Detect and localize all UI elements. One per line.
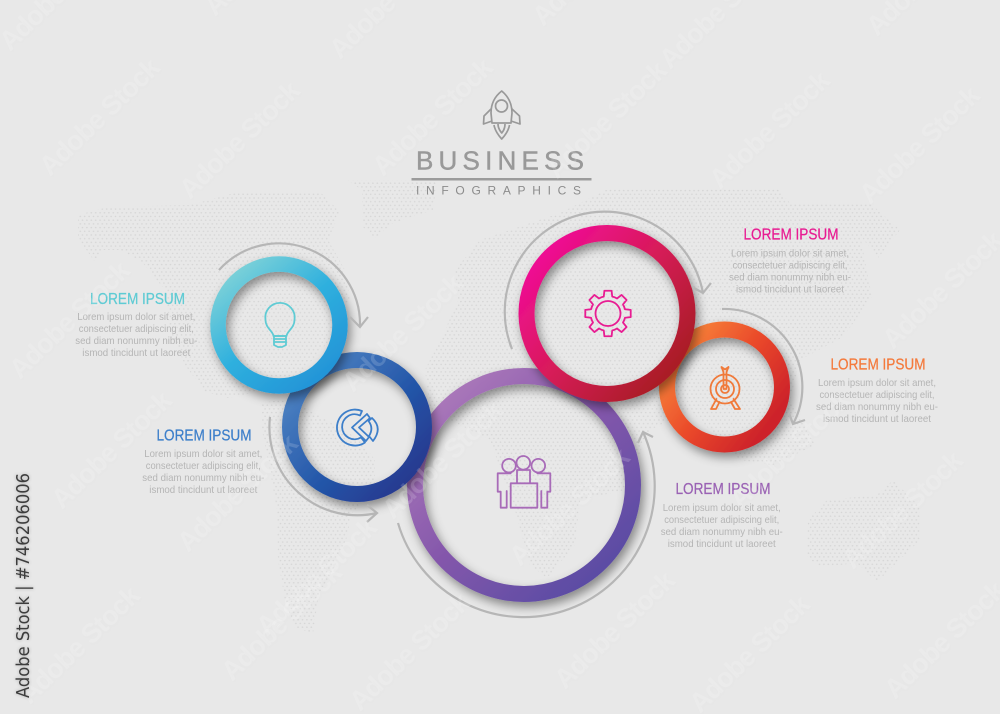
stock watermarks: Adobe Stock — [836, 444, 969, 574]
side credit: Adobe Stock | #746206006 — [13, 473, 34, 698]
stock watermarks: Adobe Stock — [366, 51, 499, 181]
stock watermarks: Adobe Stock — [723, 384, 856, 514]
stock watermarks: Adobe Stock — [13, 579, 146, 709]
stock watermarks: Adobe Stock — [343, 586, 476, 714]
text block: orange: LOREM IPSUM — [830, 356, 926, 373]
stock watermarks: Adobe Stock — [45, 384, 178, 514]
title rule — [412, 178, 592, 180]
text block: orange: sed diam nonummy nibh eu- — [816, 401, 938, 413]
text block: cyan: consectetuer adipiscing elit, — [79, 323, 194, 335]
icon: rocket — [484, 91, 520, 139]
text block: cyan: Lorem ipsum dolor sit amet, — [77, 311, 195, 323]
circle: blue chart — [278, 350, 440, 514]
stock watermarks: Adobe Stock — [376, 394, 509, 524]
text block: cyan: sed diam nonummy nibh eu- — [75, 335, 198, 347]
circle: cyan idea — [207, 255, 357, 405]
text block: cyan: ismod tincidunt ut laoreet — [82, 347, 190, 359]
stock watermarks: Adobe Stock — [853, 79, 986, 209]
text block: blue: consectetuer adipiscing elit, — [146, 460, 261, 472]
icon: target — [710, 367, 740, 409]
stock watermarks: Adobe Stock — [336, 267, 469, 397]
circle: purple team — [404, 366, 650, 614]
text block: pink: Lorem ipsum dolor sit amet, — [731, 248, 849, 260]
circle: pink gear — [515, 224, 705, 413]
arrow: pink circle — [505, 212, 711, 349]
text block: purple: ismod tincidunt ut laoreet — [668, 538, 776, 550]
text block: orange — [816, 356, 938, 425]
text block: blue: ismod tincidunt ut laoreet — [149, 484, 257, 496]
arrow: cyan circle — [219, 243, 368, 327]
text block: orange: consectetuer adipiscing elit, — [820, 389, 934, 401]
title: BUSINESS — [416, 146, 584, 176]
text block: blue — [142, 428, 265, 496]
circle: orange target — [656, 320, 800, 464]
stock watermarks: Adobe Stock — [171, 427, 304, 557]
subtitle: INFOGRAPHICS — [416, 184, 581, 198]
text block: pink: sed diam nonummy nibh eu- — [729, 272, 851, 284]
arrow: blue circle — [269, 417, 377, 522]
stock watermarks: Adobe Stock — [703, 64, 836, 194]
dotted world map — [78, 180, 920, 633]
text block: cyan — [75, 291, 198, 359]
text block: blue: sed diam nonummy nibh eu- — [142, 472, 265, 484]
text block: blue: LOREM IPSUM — [156, 428, 252, 445]
text block: purple: LOREM IPSUM — [676, 481, 770, 498]
text block: pink: consectetuer adipiscing elit, — [732, 260, 848, 272]
icon: gear — [585, 291, 631, 336]
text block: pink: LOREM IPSUM — [744, 226, 838, 243]
text block: blue: Lorem ipsum dolor sit amet, — [144, 448, 262, 460]
arrow: orange circle — [722, 309, 805, 424]
stock watermarks: Adobe Stock — [250, 511, 383, 641]
text block: cyan: LOREM IPSUM — [90, 291, 185, 308]
text block: purple: consectetuer adipiscing elit, — [664, 514, 779, 526]
stock watermarks: Adobe Stock — [173, 74, 306, 204]
stock watermarks: Adobe Stock — [33, 51, 166, 181]
header: business infographics — [412, 91, 592, 198]
stock watermarks: Adobe Stock — [540, 54, 673, 184]
text block: orange: ismod tincidunt ut laoreet — [823, 413, 931, 425]
icon: pie chart — [337, 410, 378, 446]
text block: pink — [729, 226, 851, 296]
icon: team — [498, 456, 550, 508]
icon: light bulb — [265, 303, 295, 347]
infographic canvas — [14, 90, 938, 699]
stock watermarks: Adobe Stock — [215, 556, 348, 686]
text block: pink: ismod tincidunt ut laoreet — [736, 284, 844, 296]
stock watermarks: Adobe Stock — [503, 441, 636, 571]
text block: orange: Lorem ipsum dolor sit amet, — [818, 377, 936, 389]
text block: purple: sed diam nonummy nibh eu- — [661, 526, 783, 538]
stock watermarks: Adobe Stock — [548, 564, 681, 694]
arrow: purple circle — [398, 432, 655, 617]
text block: purple — [661, 481, 783, 550]
stock watermarks: Adobe Stock — [3, 254, 136, 384]
text block: purple: Lorem ipsum dolor sit amet, — [663, 502, 781, 514]
